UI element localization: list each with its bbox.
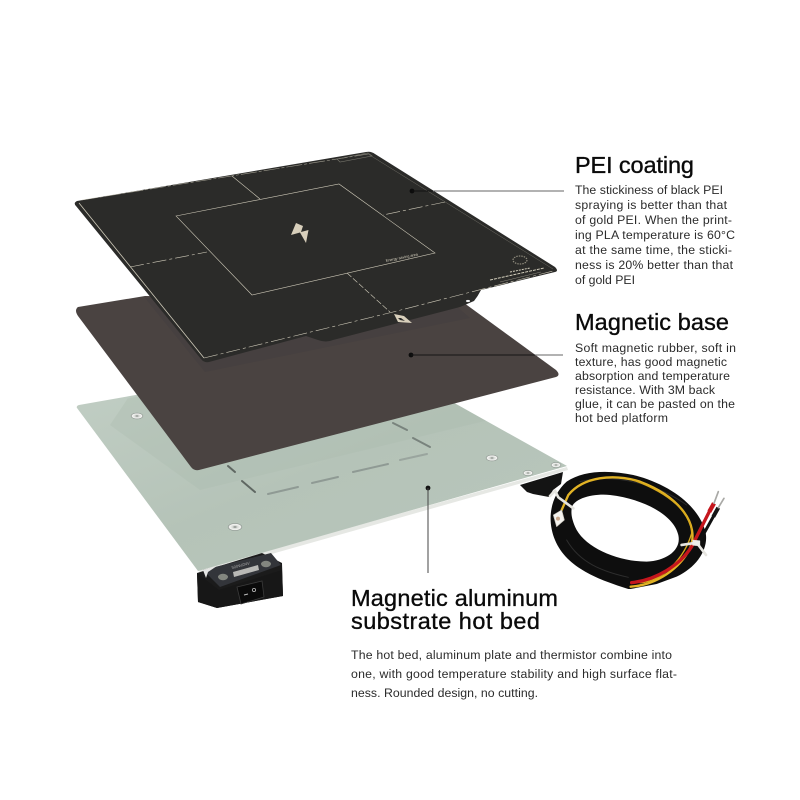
heading: PEI coating: PEI coating bbox=[575, 152, 694, 178]
text block: Magnetic base: hot bed platform bbox=[575, 411, 668, 425]
shadow of base on plate bbox=[462, 408, 476, 415]
text block: PEI coating: ness is 20% better than that bbox=[575, 258, 734, 272]
icon: triangle logo bbox=[394, 314, 412, 323]
leader line: PEI coating bbox=[410, 189, 564, 193]
sleeve highlights bbox=[567, 540, 628, 577]
plate edge bbox=[198, 467, 568, 574]
yellow wires bbox=[562, 477, 693, 587]
text block: Magnetic base: texture, has good magnetic bbox=[575, 355, 727, 369]
text block: aluminum substrate: The hot bed, aluminum plate and thermistor combine into bbox=[351, 648, 672, 662]
text block: PEI coating: of gold PEI. When the print- bbox=[575, 213, 732, 227]
text block: Magnetic base: glue, it can be pasted on the bbox=[575, 397, 735, 411]
text block: PEI coating: at the same time, the sticki- bbox=[575, 243, 732, 257]
top screws bbox=[218, 574, 228, 580]
text block: Magnetic base: absorption and temperature bbox=[575, 369, 730, 383]
heading: Magnetic aluminum substrate hot bed: Magnetic aluminum bbox=[351, 585, 558, 611]
magnetic base sheet bbox=[76, 296, 558, 470]
aluminum hot bed plate bbox=[76, 394, 568, 572]
heading: Magnetic aluminum substrate hot bed: substrate hot bed bbox=[351, 608, 540, 634]
shadow of PEI plate on base bbox=[145, 298, 470, 372]
PEI coated plate bbox=[75, 152, 557, 362]
plate marking text: Energy saving area bbox=[385, 252, 419, 263]
plate surface bbox=[77, 366, 567, 571]
cable bundle bbox=[550, 472, 724, 589]
leader line: magnetic base bbox=[409, 353, 563, 357]
text block: PEI coating: of gold PEI bbox=[575, 273, 635, 287]
heading: Magnetic base: Magnetic base bbox=[575, 309, 729, 335]
housing body bbox=[197, 553, 283, 608]
rating label bbox=[233, 565, 259, 577]
white connector bbox=[553, 510, 564, 527]
top face bbox=[203, 553, 281, 587]
silver plate corner bbox=[203, 566, 217, 578]
red wire bbox=[632, 512, 709, 583]
text block: PEI coating: ing PLA temperature is 60°C bbox=[575, 228, 735, 242]
text block: Magnetic base: resistance. With 3M back bbox=[575, 383, 716, 397]
black sleeves bbox=[551, 472, 706, 589]
black wire end bbox=[697, 517, 713, 547]
text block: PEI coating: spraying is better than that bbox=[575, 198, 728, 212]
rocker switch housing bbox=[197, 553, 283, 608]
slots bbox=[228, 423, 430, 494]
rocker bbox=[237, 581, 264, 604]
heading: Magnetic aluminum substrate hot bed bbox=[351, 585, 558, 634]
leader line: aluminum substrate bbox=[426, 486, 430, 573]
text block: aluminum substrate: one, with good temperature stability and high surface flat- bbox=[351, 667, 677, 681]
text block: aluminum substrate bbox=[351, 648, 677, 700]
rear bracket under plate bbox=[520, 472, 563, 497]
cable ties bbox=[550, 491, 573, 508]
plate body bbox=[75, 152, 557, 362]
corner markings bbox=[490, 268, 544, 282]
corner emblem bbox=[513, 256, 527, 264]
text block: PEI coating bbox=[575, 183, 735, 287]
centre square bbox=[176, 184, 435, 295]
text block: Magnetic base bbox=[575, 341, 736, 425]
screws bbox=[131, 413, 561, 531]
text block: PEI coating: The stickiness of black PEI bbox=[575, 183, 723, 197]
icon: lightning bolt bbox=[291, 223, 308, 243]
outer border lines bbox=[79, 154, 553, 358]
rocker switch housing: 500W/24V bbox=[231, 560, 251, 570]
text block: Magnetic base: Soft magnetic rubber, soft in bbox=[575, 341, 736, 355]
text block: aluminum substrate: ness. Rounded design, no cutting. bbox=[351, 686, 538, 700]
